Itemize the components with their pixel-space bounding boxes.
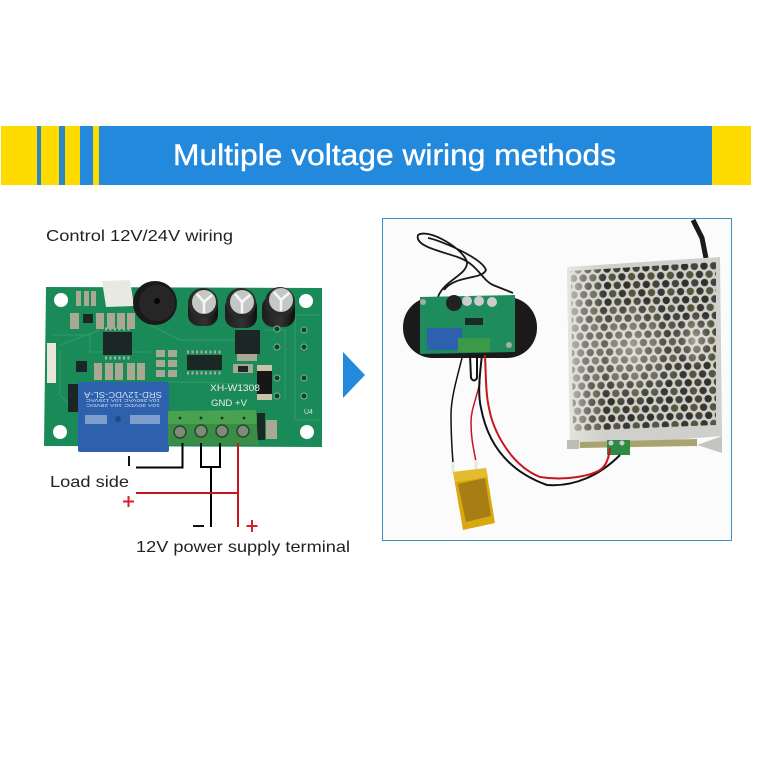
power wire red	[136, 443, 238, 527]
title: Multiple voltage wiring methods	[173, 139, 616, 172]
circuit board	[44, 280, 322, 452]
header banner	[1, 126, 751, 185]
label: load side: Load side	[50, 474, 129, 491]
photo panel	[382, 218, 732, 540]
relay: 10A 30VDC 10A 28VDC	[85, 403, 160, 408]
arrow	[343, 352, 365, 398]
board silk labels: XH-W1308	[210, 383, 260, 394]
terminal block	[168, 410, 258, 445]
supply minus	[193, 525, 204, 527]
black power resistor	[257, 365, 272, 400]
circuit board: GND +V	[211, 398, 248, 409]
mounting holes	[53, 293, 314, 439]
left heading: control wiring: Control 12V/24V wiring	[46, 228, 233, 245]
supply plus	[246, 520, 258, 532]
SMD components	[70, 291, 277, 439]
controller to heater and supply wires	[451, 355, 620, 485]
heater film	[453, 468, 495, 530]
ICs	[103, 330, 260, 370]
load marker	[128, 456, 130, 466]
label: power supply terminal: 12V power supply terminal	[136, 539, 350, 556]
relay	[78, 382, 169, 452]
circuit board: U4	[304, 409, 313, 416]
buzzer	[133, 281, 177, 325]
power cord	[693, 220, 706, 258]
side pin header	[47, 343, 56, 383]
dark SMD parts	[68, 314, 265, 440]
right pads	[274, 326, 307, 399]
relay: 10A 250VAC 10A 125VAC	[85, 398, 160, 403]
white heater leads	[453, 460, 476, 473]
power wire black	[201, 443, 220, 527]
controller plate	[403, 295, 537, 358]
IC pins	[105, 329, 222, 373]
power terminal	[607, 440, 630, 455]
white connector	[102, 280, 134, 307]
power supply	[567, 257, 722, 455]
wiring diagram	[123, 443, 258, 532]
load wire black	[136, 443, 182, 468]
sensor cable	[418, 234, 513, 297]
capacitors	[188, 287, 295, 328]
PCB	[44, 287, 322, 447]
load plus	[123, 496, 134, 507]
relay: SRD-12VDC-SL-A	[83, 390, 162, 399]
